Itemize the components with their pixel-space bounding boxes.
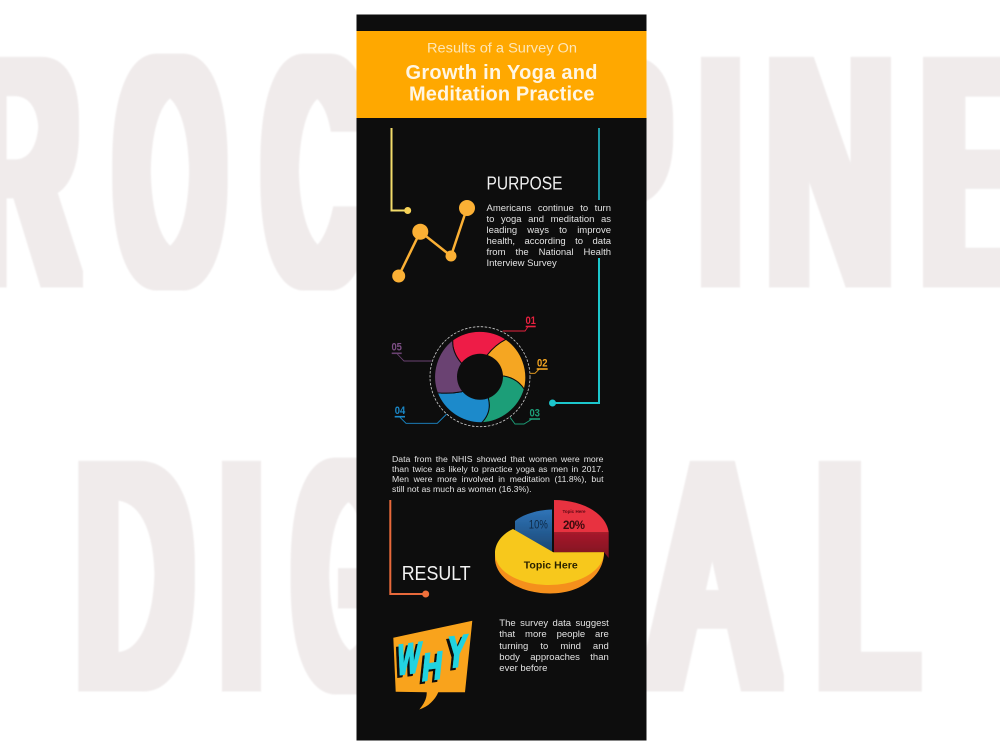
- main title: Meditation Practice: [409, 84, 594, 106]
- pie labels: [524, 509, 586, 572]
- subtitle: Results of a Survey On: [427, 40, 577, 56]
- background watermark: ROCKPINE: P: [555, 0, 669, 346]
- purpose text: Interview Survey: [486, 258, 557, 269]
- pie labels: 10%: [529, 519, 548, 531]
- survey findings text: than twice as likely to practice yoga as men in 2017.: [392, 464, 604, 474]
- blue slice: [515, 510, 552, 552]
- donut chart: [430, 327, 530, 427]
- pie labels: 20%: [563, 520, 585, 532]
- conclusion text: [499, 618, 609, 674]
- orange pie side: [495, 552, 604, 594]
- why speech bubble: [393, 621, 472, 710]
- pie labels: Topic Here: [524, 560, 578, 572]
- why lettering: Y: [445, 625, 469, 677]
- background watermark: ROCKPINE: C: [267, 0, 361, 346]
- donut label 02: [530, 358, 548, 373]
- survey findings text: still not as much as women (16.3%).: [392, 484, 532, 494]
- conclusion text: body approaches than: [499, 652, 609, 663]
- why lettering: [395, 625, 469, 690]
- background watermark: ROCKPINE: [0, 0, 1000, 347]
- donut label 04: [395, 405, 447, 423]
- survey findings text: Men were more involved in meditation (11.8%), but: [392, 474, 604, 484]
- purpose text: to yoga and meditation as: [486, 214, 611, 225]
- main title: Growth in Yoga and: [406, 62, 598, 84]
- purpose text: leading ways to improve: [486, 225, 611, 236]
- result heading: RESULT: [402, 562, 471, 585]
- conclusion text: turning to mind and: [499, 640, 609, 652]
- pie chart: [495, 500, 609, 594]
- infographic panel: [356, 14, 646, 740]
- donut label 05: [391, 342, 432, 361]
- background watermark: DIGITAL: G: [297, 401, 399, 750]
- purpose text: Americans continue to turn: [486, 203, 611, 214]
- yellow slice: [495, 529, 604, 585]
- donut label 04: 04: [395, 405, 406, 417]
- background watermark: DIGITAL: A: [653, 401, 771, 750]
- background watermark: ROCKPINE: N: [768, 0, 892, 346]
- conclusion text: The survey data suggest: [499, 618, 609, 629]
- why lettering: W: [395, 634, 424, 685]
- background watermark: ROCKPINE: O: [119, 0, 221, 346]
- header band: [356, 31, 646, 118]
- donut label 03: [510, 408, 540, 424]
- conclusion text: that more people are: [499, 629, 609, 640]
- orange connector line: [390, 500, 429, 598]
- purpose heading: PURPOSE: [486, 173, 562, 193]
- survey findings text: Data from the NHIS showed that women were more: [392, 454, 604, 464]
- background watermark: DIGITAL: D: [79, 403, 189, 750]
- background watermark: DIGITAL: I: [420, 402, 460, 750]
- yellow connector line: [392, 128, 411, 214]
- background watermark: DIGITAL: I: [222, 402, 261, 750]
- why lettering: H: [420, 644, 445, 690]
- donut label 01: 01: [525, 315, 536, 327]
- background watermark: ROCKPINE: I: [701, 0, 740, 347]
- background watermark: ROCKPINE: K: [409, 0, 511, 347]
- background watermark: DIGITAL: [79, 401, 915, 750]
- survey findings text: [392, 454, 604, 494]
- purpose text: [486, 203, 612, 269]
- donut label 02: 02: [537, 358, 548, 370]
- purpose text: health, according to data: [486, 236, 611, 247]
- background watermark: DIGITAL: L: [817, 401, 915, 750]
- red slice: [554, 500, 609, 558]
- background watermark: DIGITAL: T: [495, 401, 585, 750]
- purpose text: from the National Health: [486, 247, 611, 258]
- donut label 01: [503, 315, 536, 331]
- donut segments: [435, 331, 526, 423]
- line chart icon: [392, 200, 475, 282]
- conclusion text: ever before: [499, 663, 547, 674]
- dashed ring: [430, 327, 530, 427]
- donut label 03: 03: [529, 408, 540, 420]
- donut label 05: 05: [391, 342, 402, 354]
- teal connector line: [549, 128, 599, 406]
- pie labels: Topic Here: [562, 509, 586, 514]
- main title: [406, 62, 598, 106]
